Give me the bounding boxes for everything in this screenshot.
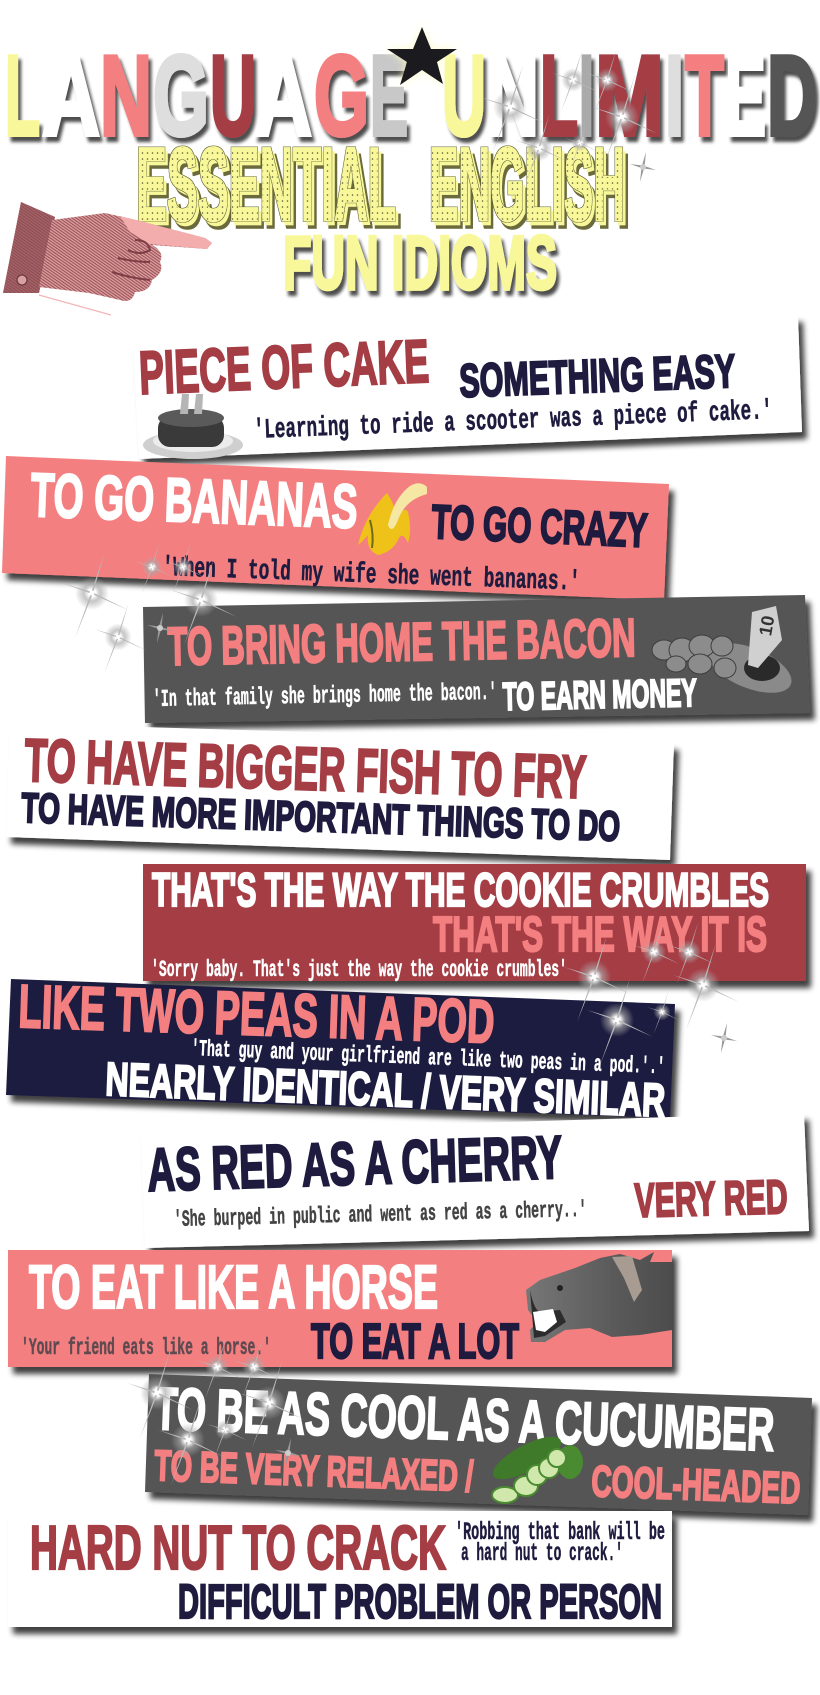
banner: to eat like a horse <box>8 1250 672 1369</box>
title: Language Unlimited: G <box>314 33 369 160</box>
icon: pointing hand <box>3 202 212 315</box>
heading: AS RED AS A CHERRY <box>146 1123 563 1204</box>
title: Language Unlimited: L <box>540 33 578 160</box>
title: Language Unlimited: A <box>42 33 100 160</box>
example sentence: 'When I told my wife she went bananas.' <box>162 553 581 599</box>
sparkles: cucumber banner <box>127 1338 305 1485</box>
title: Language Unlimited: T <box>685 33 724 160</box>
icon: horse head <box>526 1252 672 1342</box>
heading: TO EAT LIKE A HORSE <box>29 1253 438 1321</box>
subtitle: Essential English: ESSENTIAL <box>136 127 396 243</box>
subtitle: Fun Idioms: FUN IDIOMS <box>283 221 557 306</box>
heading: PIECE OF CAKE <box>138 327 430 407</box>
title: Language Unlimited: E <box>725 33 766 160</box>
banner: that's the way the cookie crumbles <box>143 863 806 983</box>
example sentence: 'In that family she brings home the bacon.' <box>153 680 497 714</box>
sparkles: title <box>480 51 658 184</box>
title: Language Unlimited: N <box>487 33 539 160</box>
banner: like two peas in a pod <box>6 972 675 1126</box>
banner: piece of cake <box>133 315 802 459</box>
banner: to go bananas <box>2 456 669 600</box>
banner: hard nut to crack <box>8 1511 672 1629</box>
meaning: first part: TO BE VERY RELAXED / <box>154 1442 474 1501</box>
title: Language Unlimited: A <box>254 33 312 160</box>
icon: coins and money: 10 <box>755 614 778 637</box>
sparkles: cookie banner <box>564 923 739 1065</box>
heading: TO GO BANANAS <box>29 461 359 542</box>
banner: to bring home the bacon <box>143 595 810 723</box>
example sentence <box>455 1518 665 1568</box>
example sentence: 'Your friend eats like a horse.' <box>21 1335 271 1361</box>
heading: LIKE TWO PEAS IN A POD <box>18 972 496 1056</box>
meaning: TO GO CRAZY <box>431 496 649 558</box>
meaning: TO EAT A LOT <box>311 1315 519 1369</box>
title: Language Unlimited <box>5 33 817 160</box>
title: Language Unlimited: E <box>370 33 408 160</box>
banner: to have bigger fish to fry <box>6 723 674 860</box>
title: Language Unlimited: G <box>153 33 209 160</box>
icon: cucumber <box>487 1429 583 1503</box>
title: Language Unlimited: N <box>100 33 152 160</box>
icon: black star <box>387 27 457 85</box>
title: Language Unlimited: M <box>595 33 664 160</box>
icon: banana <box>358 483 427 555</box>
banner: as red as a cherry <box>141 1113 809 1248</box>
title: Language Unlimited: I <box>665 33 684 160</box>
title: Language Unlimited: L <box>5 33 40 160</box>
banner: to be as cool as a cucumber <box>145 1374 812 1515</box>
sparkles: second banner <box>62 542 237 673</box>
title: Language Unlimited: U <box>442 33 486 160</box>
title: Language Unlimited: I <box>579 33 594 160</box>
icon: coins and money <box>652 606 798 703</box>
title: Language Unlimited: U <box>210 33 256 160</box>
example sentence: a hard nut to crack.' <box>461 1539 623 1568</box>
heading: HARD NUT TO CRACK <box>30 1514 446 1583</box>
icon: cake <box>143 394 243 459</box>
